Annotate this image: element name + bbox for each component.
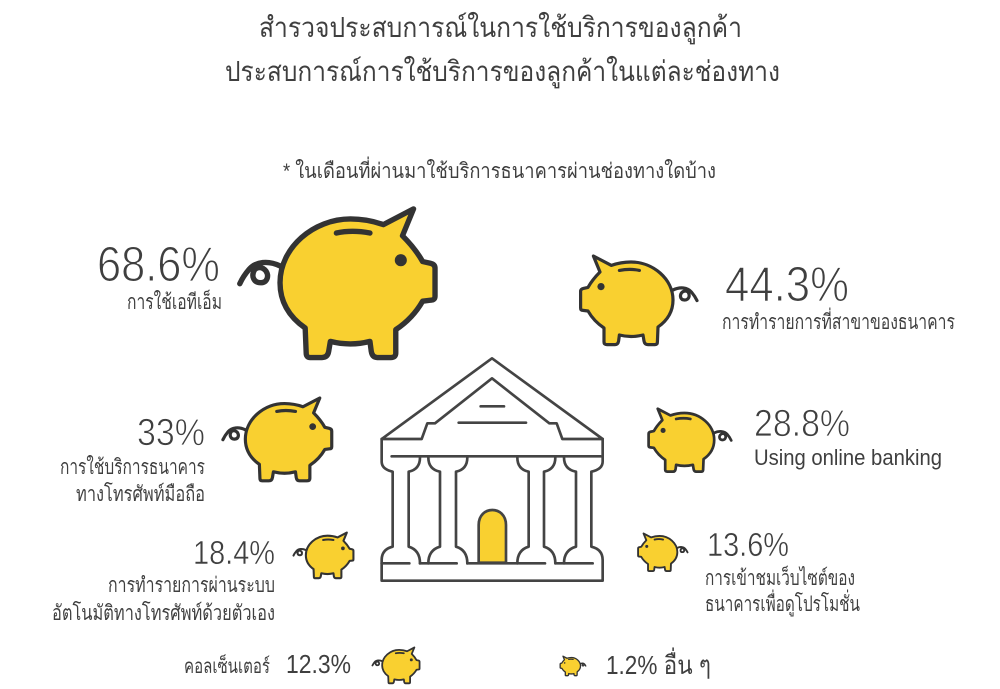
stat: ATM: การใช้เอทีเอ็ม (127, 288, 222, 314)
stat: online banking: Using online banking (754, 445, 942, 470)
pig: online banking 28.8% (649, 409, 731, 472)
stat: call center: 12.3% (286, 649, 351, 679)
title (225, 11, 780, 89)
stat: call center: คอลเซ็นเตอร์ (184, 653, 270, 678)
pig: branch 44.3% (581, 256, 697, 345)
stat: branch: 44.3% (725, 258, 849, 312)
stat: branch (722, 258, 955, 334)
title: สำรวจประสบการณ์ในการใช้บริการของลูกค้า (259, 11, 742, 45)
stat: mobile: การใช้บริการธนาคาร (60, 455, 205, 479)
stat: website: การเข้าชมเว็บไซต์ของ (705, 564, 855, 590)
stat: mobile (60, 412, 205, 506)
stat: website: ธนาคารเพื่อดูโปรโมชั่น (705, 589, 860, 617)
stat: website (705, 526, 860, 617)
stat: phone automated (52, 534, 275, 625)
pig: mobile 33% (223, 398, 332, 481)
pig: ATM 68.6% (240, 209, 435, 358)
pig: call center 12.3% (372, 647, 420, 683)
icon: bank building (382, 358, 603, 581)
subtitle: * ในเดือนที่ผ่านมาใช้บริการธนาคารผ่านช่องทางใดบ้าง (283, 156, 716, 183)
title: ประสบการณ์การใช้บริการของลูกค้าในแต่ละช่องทาง (225, 55, 780, 89)
pig: other 1.2% (560, 656, 586, 676)
pig: website 13.6% (638, 533, 688, 571)
stat: online banking: 28.8% (754, 403, 850, 445)
stat: website: 13.6% (707, 526, 789, 563)
pig: phone automated 18.4% (293, 533, 353, 578)
stat: other: 1.2% อื่น ๆ (606, 647, 711, 680)
stat: online banking (754, 403, 942, 470)
stat: ATM: 68.6% (97, 238, 220, 292)
stat: call center (184, 649, 351, 679)
stat: ATM (97, 238, 222, 314)
stat: mobile: 33% (137, 412, 205, 454)
stat: phone automated: อัตโนมัติทางโทรศัพท์ด้วยตัวเอง (52, 601, 275, 625)
stat: phone automated: 18.4% (193, 534, 275, 571)
stat: phone automated: การทำรายการผ่านระบบ (108, 574, 275, 597)
stat: mobile: ทางโทรศัพท์มือถือ (76, 482, 205, 506)
